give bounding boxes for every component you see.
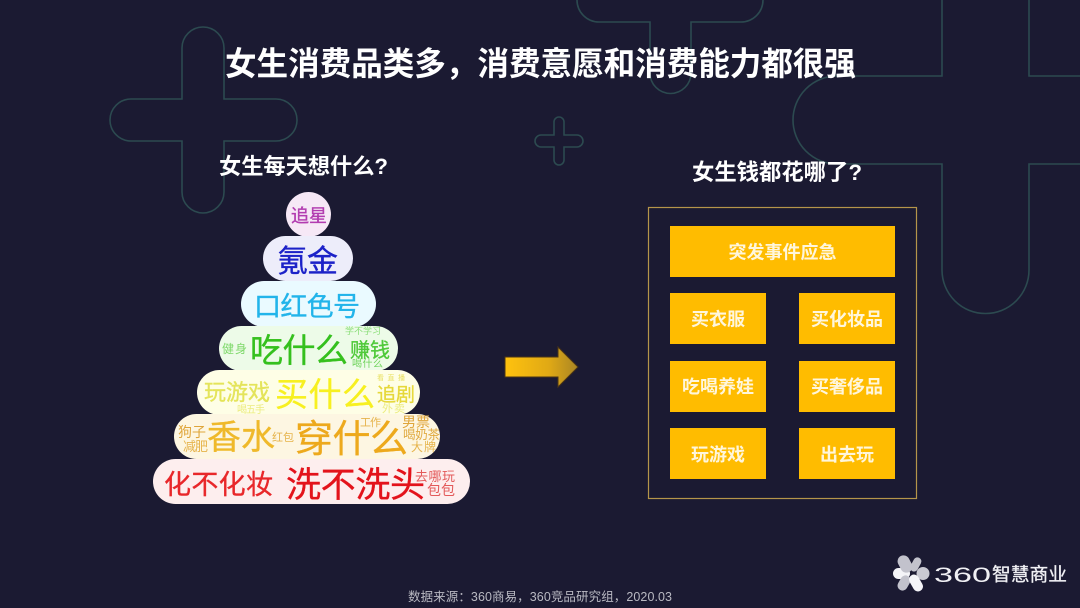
- tier 5: yellow words: 外卖: [382, 402, 405, 415]
- box: 吃喝养娃: 吃喝养娃: [682, 376, 754, 397]
- icon: flower mark: [893, 553, 930, 593]
- source note: 数据来源：360商易，360竞品研究组，2020.03: [408, 589, 672, 604]
- tier 6: orange words: 男票: [402, 414, 430, 430]
- tier 4: green words: [219, 325, 398, 371]
- tier 1: 追星: [286, 192, 331, 237]
- tier 4: green words: 学不学习: [345, 325, 381, 336]
- arrow: [505, 347, 578, 387]
- tier 6: orange words: 喝奶茶: [403, 427, 440, 442]
- logo: 360 智慧商业: [893, 553, 1067, 593]
- tier 6: orange words: 红包: [272, 431, 294, 444]
- tier 7: red words: 洗不洗头: [286, 466, 425, 505]
- box: 买奢侈品: 买奢侈品: [811, 377, 883, 397]
- heading: where the money goes: 女生钱都花哪了?: [692, 160, 862, 185]
- tier 4: green words: 赚钱: [350, 339, 390, 362]
- box: 买衣服: [670, 293, 766, 344]
- tier 4: green words: 喝什么: [352, 358, 383, 370]
- tier 6: orange words: 大牌: [411, 440, 436, 454]
- tier 7: red words: 去哪玩: [415, 469, 455, 484]
- tier 2: 氪金: 氪金: [277, 244, 338, 279]
- tier 4: green words: 吃什么: [250, 332, 348, 369]
- tier 4: green words: 健身: [222, 341, 247, 356]
- tier 3: 口红色号: 口红色号: [254, 292, 360, 322]
- tier 6: orange words: [174, 414, 440, 461]
- box: 突发事件应急: 突发事件应急: [728, 242, 836, 262]
- tier 5: yellow words: 追剧: [377, 384, 415, 406]
- tier 6: orange words: 香水: [207, 419, 275, 457]
- tier 5: yellow words: [197, 370, 420, 416]
- tier 6: orange words: 减肥: [183, 439, 208, 454]
- tier 6: orange words: 狗子: [178, 424, 206, 440]
- tier 5: yellow words: 玩游戏: [204, 380, 270, 405]
- title: 女生消费品类多，消费意愿和消费能力都很强: [225, 46, 856, 82]
- box: 玩游戏: [670, 428, 766, 479]
- box: 玩游戏: 玩游戏: [691, 444, 745, 465]
- tier 2: 氪金: [263, 236, 353, 281]
- tier 7: red words: 化不化妆: [164, 470, 273, 500]
- tier 7: red words: [153, 459, 470, 505]
- box: 出去玩: 出去玩: [820, 445, 874, 465]
- box: 买奢侈品: [799, 361, 895, 412]
- tier 1: 追星: 追星: [291, 206, 327, 226]
- logo: 360 智慧商业: 360: [934, 564, 991, 587]
- box: 买化妆品: 买化妆品: [811, 308, 883, 330]
- tier 5: yellow words: 看直播: [377, 373, 405, 382]
- box: 突发事件应急: [670, 226, 895, 277]
- tier 6: orange words: 穿什么: [295, 419, 408, 461]
- tier 3: 口红色号: [241, 281, 376, 327]
- logo: 360 智慧商业: 智慧商业: [992, 564, 1067, 585]
- tier 5: yellow words: 买什么: [275, 376, 375, 413]
- box: 出去玩: [799, 428, 895, 479]
- tier 5: yellow words: 喝五手: [237, 403, 265, 416]
- panel: spending categories: [648, 208, 916, 498]
- box: 买衣服: 买衣服: [691, 308, 745, 330]
- word cloud pyramid: [153, 192, 470, 505]
- tier 6: orange words: 工作: [360, 416, 381, 429]
- box: 吃喝养娃: [670, 361, 766, 412]
- box: 买化妆品: [799, 293, 895, 344]
- tier 7: red words: 包包: [427, 482, 455, 498]
- heading: what girls think about: 女生每天想什么?: [219, 154, 388, 179]
